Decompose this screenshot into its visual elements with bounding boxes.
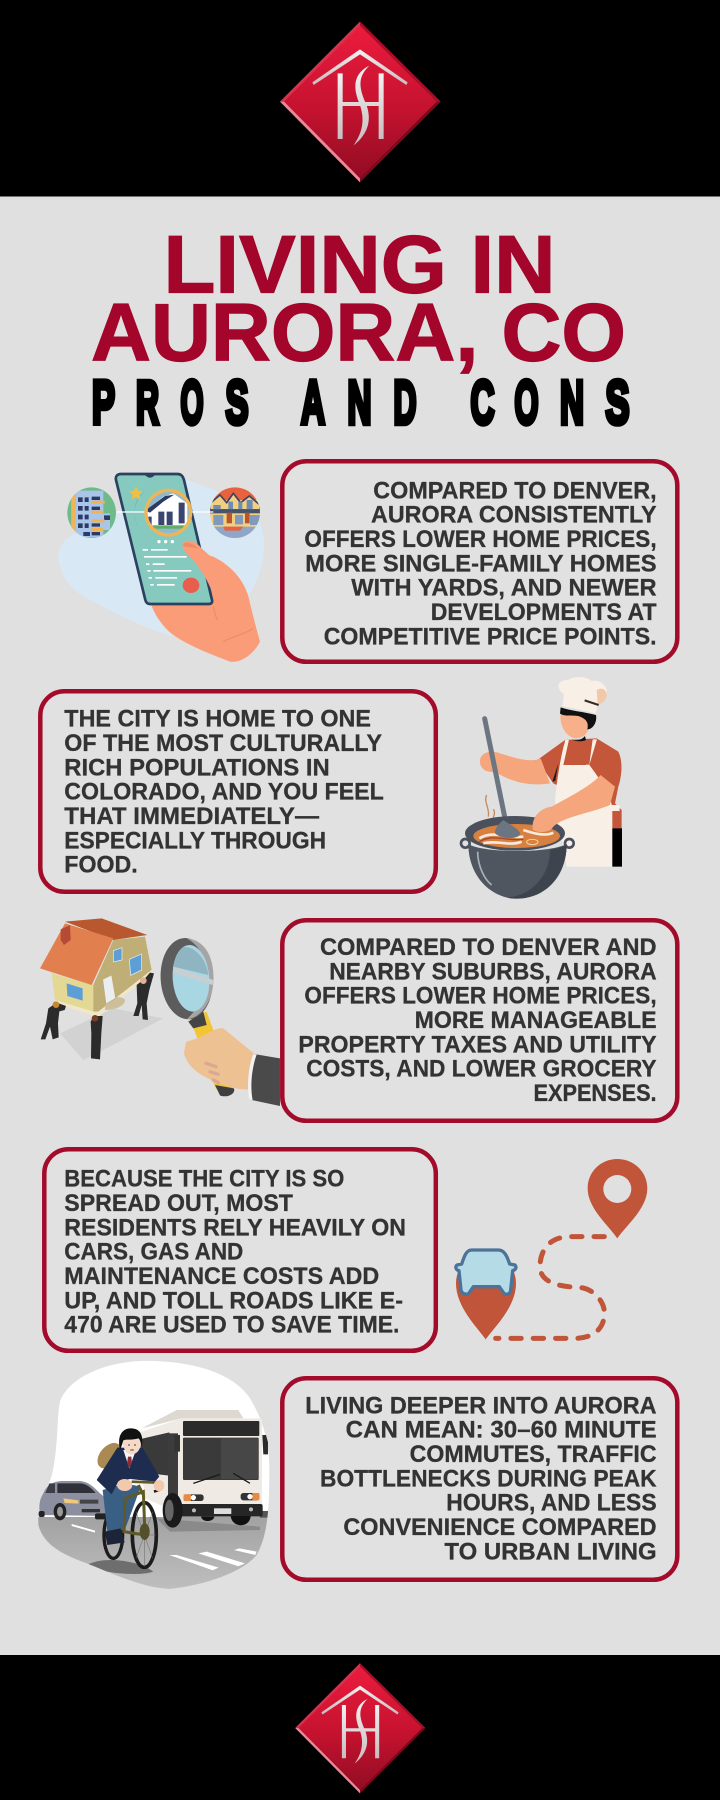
illustration: cyclist, bus and car in traffic [30,1361,280,1594]
panel: cultural food: COLORADO, AND YOU FEEL [64,779,384,806]
subtitle: D [394,368,416,436]
panel: commute drawbacks: HOURS, AND LESS [446,1490,657,1517]
subtitle: A [301,368,325,436]
panel: lower home prices: COMPETITIVE PRICE POINTS. [324,623,657,650]
panel: lower costs: EXPENSES. [534,1080,657,1107]
subtitle: N [348,368,372,436]
panel: lower costs: PROPERTY TAXES AND UTILITY [298,1031,657,1058]
subtitle: R [136,368,159,436]
illustration: route map with pins and car [456,1159,647,1339]
panel: car reliance: RESIDENTS RELY HEAVILY ON [64,1214,406,1241]
illustration: hand holding phone with home listings [58,474,264,662]
panel: cultural food: RICH POPULATIONS IN [64,754,330,781]
subtitle: O [514,368,538,436]
panel: commute drawbacks: TO URBAN LIVING [444,1538,657,1565]
panel: lower home prices: WITH YARDS, AND NEWER [351,575,657,602]
panel: lower home prices [282,461,677,662]
footer band [0,1655,720,1800]
panel: commute drawbacks: LIVING DEEPER INTO AURORA [305,1392,657,1419]
panel: car reliance [44,1149,436,1351]
panel: cultural food: FOOD. [64,852,138,879]
panel: commute drawbacks [282,1378,677,1580]
panel: lower costs: MORE MANAGEABLE [415,1007,657,1034]
panel: cultural food: ESPECIALLY THROUGH [64,827,326,854]
panel: car reliance: CARS, GAS AND [64,1239,243,1266]
illustration: house lifted and magnifying glass [40,918,280,1106]
subtitle: S [226,368,248,436]
panel: lower home prices: DEVELOPMENTS AT [431,599,657,626]
panel: lower home prices: COMPARED TO DENVER, [373,477,657,504]
panel: commute drawbacks: BOTTLENECKS DURING PEAK [320,1465,657,1492]
panel: car reliance: MAINTENANCE COSTS ADD [64,1263,379,1290]
panel: car reliance: BECAUSE THE CITY IS SO [64,1166,344,1193]
illustration: chef stirring pot [461,677,622,899]
title [91,220,626,378]
title: LIVING IN [164,220,556,310]
panel: cultural food: THAT IMMEDIATELY— [64,803,319,830]
panel: lower home prices: AURORA CONSISTENTLY [371,502,657,529]
panel: lower costs: COSTS, AND LOWER GROCERY [306,1056,657,1083]
panel: commute drawbacks: CAN MEAN: 30–60 MINUTE [346,1417,657,1444]
logo: bottom diamond [295,1663,425,1793]
panel: lower costs: OFFERS LOWER HOME PRICES, [304,983,657,1010]
panel: lower home prices: OFFERS LOWER HOME PRICES, [304,526,657,553]
panel: car reliance: SPREAD OUT, MOST [64,1190,293,1217]
subtitle: S [606,368,630,436]
subtitle: O [180,368,204,436]
panel: lower costs: NEARBY SUBURBS, AURORA [329,958,657,985]
subtitle: P [92,368,115,436]
logo: top diamond [280,22,441,182]
panel: car reliance: UP, AND TOLL ROADS LIKE E- [64,1287,403,1314]
header band [0,0,720,196]
panel: cultural food: THE CITY IS HOME TO ONE [64,706,371,733]
panel: lower costs: COMPARED TO DENVER AND [320,934,657,961]
panel: cultural food: OF THE MOST CULTURALLY [64,730,382,757]
panel: commute drawbacks: CONVENIENCE COMPARED [343,1514,657,1541]
subtitle [92,368,630,436]
panel: lower costs [282,920,677,1121]
panel: commute drawbacks: COMMUTES, TRAFFIC [410,1441,657,1468]
subtitle: N [560,368,584,436]
panel: cultural food [40,691,436,892]
subtitle: C [470,368,494,436]
panel: car reliance: 470 ARE USED TO SAVE TIME. [64,1312,399,1339]
panel: lower home prices: MORE SINGLE-FAMILY HOMES [305,550,657,577]
title: AURORA, CO [91,288,626,378]
